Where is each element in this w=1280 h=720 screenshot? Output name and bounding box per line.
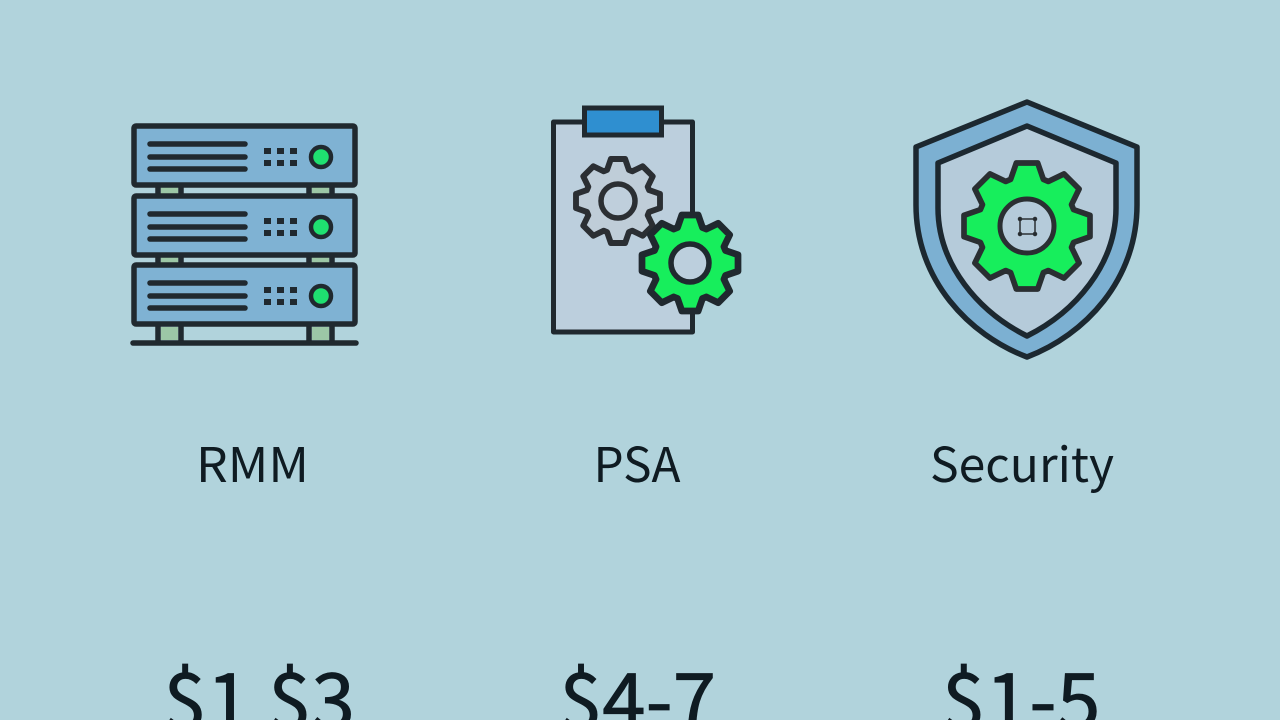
- icon: security shield with gear: [916, 102, 1137, 357]
- icon: server rack: [133, 126, 356, 343]
- label: RMM: RMM: [196, 426, 309, 496]
- label: PSA: PSA: [594, 426, 680, 496]
- label: Security: Security: [930, 426, 1114, 496]
- icon: clipboard with gears: [554, 108, 738, 332]
